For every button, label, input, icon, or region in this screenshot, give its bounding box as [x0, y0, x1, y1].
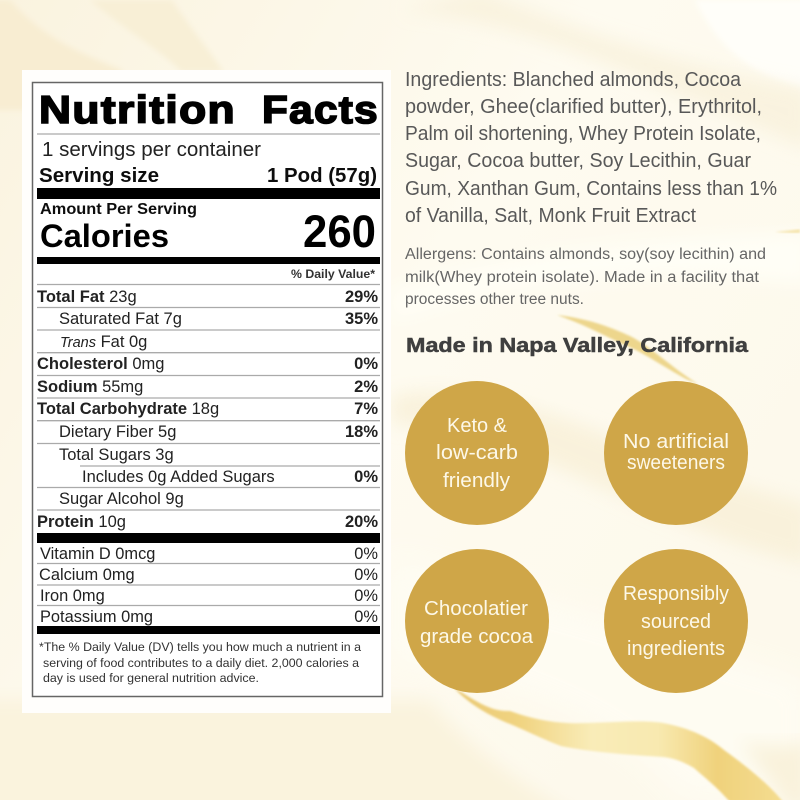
ingredients text: Sugar, Cocoa butter, Soy Lecithin, Guar [405, 150, 751, 172]
servings per container: 1 servings per container [42, 139, 261, 161]
vitamin and mineral rows: 0% [354, 566, 378, 584]
heading: Made in Napa Valley: Made in Napa Valley, California [406, 334, 749, 357]
badge: no artificial sweeteners: sweeteners [627, 452, 725, 474]
heading: Nutrition Facts: Nutrition [39, 89, 236, 132]
badge: chocolatier [405, 549, 549, 693]
panel: nutrition facts label [32, 82, 382, 696]
vitamin and mineral rows: 0% [354, 608, 378, 626]
nutrient rows: Saturated Fat 7g [59, 310, 182, 328]
nutrient rows: 29% [345, 288, 378, 306]
footnote [39, 640, 361, 685]
badge: chocolatier: grade cocoa [420, 626, 534, 648]
ingredients text: of Vanilla, Salt, Monk Fruit Extract [405, 205, 696, 227]
ingredients text: Gum, Xanthan Gum, Contains less than 1% [405, 178, 777, 200]
nutrient rows: 0% [354, 468, 378, 486]
vitamin and mineral rows: Iron 0mg [40, 587, 105, 605]
footnote: serving of food contributes to a daily diet. 2,000 calories a [43, 656, 359, 670]
nutrient rows: Dietary Fiber 5g [59, 423, 176, 441]
badge: responsibly sourced: sourced [641, 611, 711, 633]
gold ribbon upper [557, 315, 698, 384]
badge: no artificial sweeteners: No artificial [623, 431, 729, 453]
ingredients text: powder, Ghee(clarified butter), Erythritol, [405, 96, 762, 118]
badge: responsibly sourced: ingredients [627, 638, 725, 660]
nutrient rows: 18% [345, 423, 378, 441]
badge: keto [405, 381, 549, 525]
badge: keto: friendly [443, 470, 510, 492]
nutrient rows: Sodium 55mg [37, 378, 143, 396]
ingredients text [405, 69, 777, 227]
daily value header: % Daily Value* [291, 267, 375, 281]
panel: white label card [22, 70, 391, 713]
allergens text: milk(Whey protein isolate). Made in a facility that [405, 269, 760, 286]
vitamin and mineral rows: Vitamin D 0mcg [40, 545, 155, 563]
nutrient rows: 2% [354, 378, 378, 396]
nutrient rows: Total Carbohydrate 18g [37, 400, 219, 418]
nutrient rows: 0% [354, 355, 378, 373]
vitamin and mineral rows: Calcium 0mg [39, 566, 135, 584]
serving size row: 1 Pod (57g) [267, 165, 377, 187]
ingredients text: Palm oil shortening, Whey Protein Isolate, [405, 123, 761, 145]
serving size row: Serving size [39, 165, 159, 187]
heading: Nutrition Facts [39, 89, 379, 132]
calories row: Calories [40, 218, 169, 254]
nutrient rows: Total Fat 23g [37, 288, 137, 306]
ingredients text: Ingredients: Blanched almonds, Cocoa [405, 69, 742, 91]
calories row: 260 [303, 206, 376, 257]
nutrient rows: Total Sugars 3g [59, 446, 174, 464]
vitamin and mineral rows: 0% [354, 545, 378, 563]
badge: chocolatier: Chocolatier [424, 598, 528, 620]
footnote: day is used for general nutrition advice. [43, 671, 259, 685]
badge: responsibly sourced [604, 549, 748, 693]
nutrient rows: 7% [354, 400, 378, 418]
nutrient rows: Trans Fat 0g [60, 333, 147, 351]
nutrient rows: 20% [345, 513, 378, 531]
nutrient rows: Includes 0g Added Sugars [82, 468, 275, 486]
allergens text [405, 246, 766, 308]
amount per serving: Amount Per Serving [40, 201, 197, 218]
nutrient rows [37, 288, 380, 531]
serving size row [39, 165, 377, 187]
badge: no artificial sweeteners [604, 381, 748, 525]
badge: responsibly sourced: Responsibly [623, 583, 729, 605]
vitamin and mineral rows: Potassium 0mg [40, 608, 153, 626]
nutrient rows: Protein 10g [37, 513, 126, 531]
nutrient rows: Cholesterol 0mg [37, 355, 164, 373]
gold ribbon lower [454, 688, 783, 800]
vitamin and mineral rows: 0% [354, 587, 378, 605]
nutrient rows: Sugar Alcohol 9g [59, 490, 184, 508]
vitamin and mineral rows [37, 545, 380, 626]
nutrient rows: 35% [345, 310, 378, 328]
calories row [40, 206, 376, 257]
allergens text: processes other tree nuts. [405, 291, 584, 308]
heading: Nutrition Facts: Facts [262, 89, 379, 132]
allergens text: Allergens: Contains almonds, soy(soy lecithin) and [405, 246, 766, 263]
badge: keto: Keto & [447, 415, 508, 437]
badge: keto: low-carb [436, 442, 518, 464]
footnote: *The % Daily Value (DV) tells you how much a nutrient in a [39, 640, 361, 654]
